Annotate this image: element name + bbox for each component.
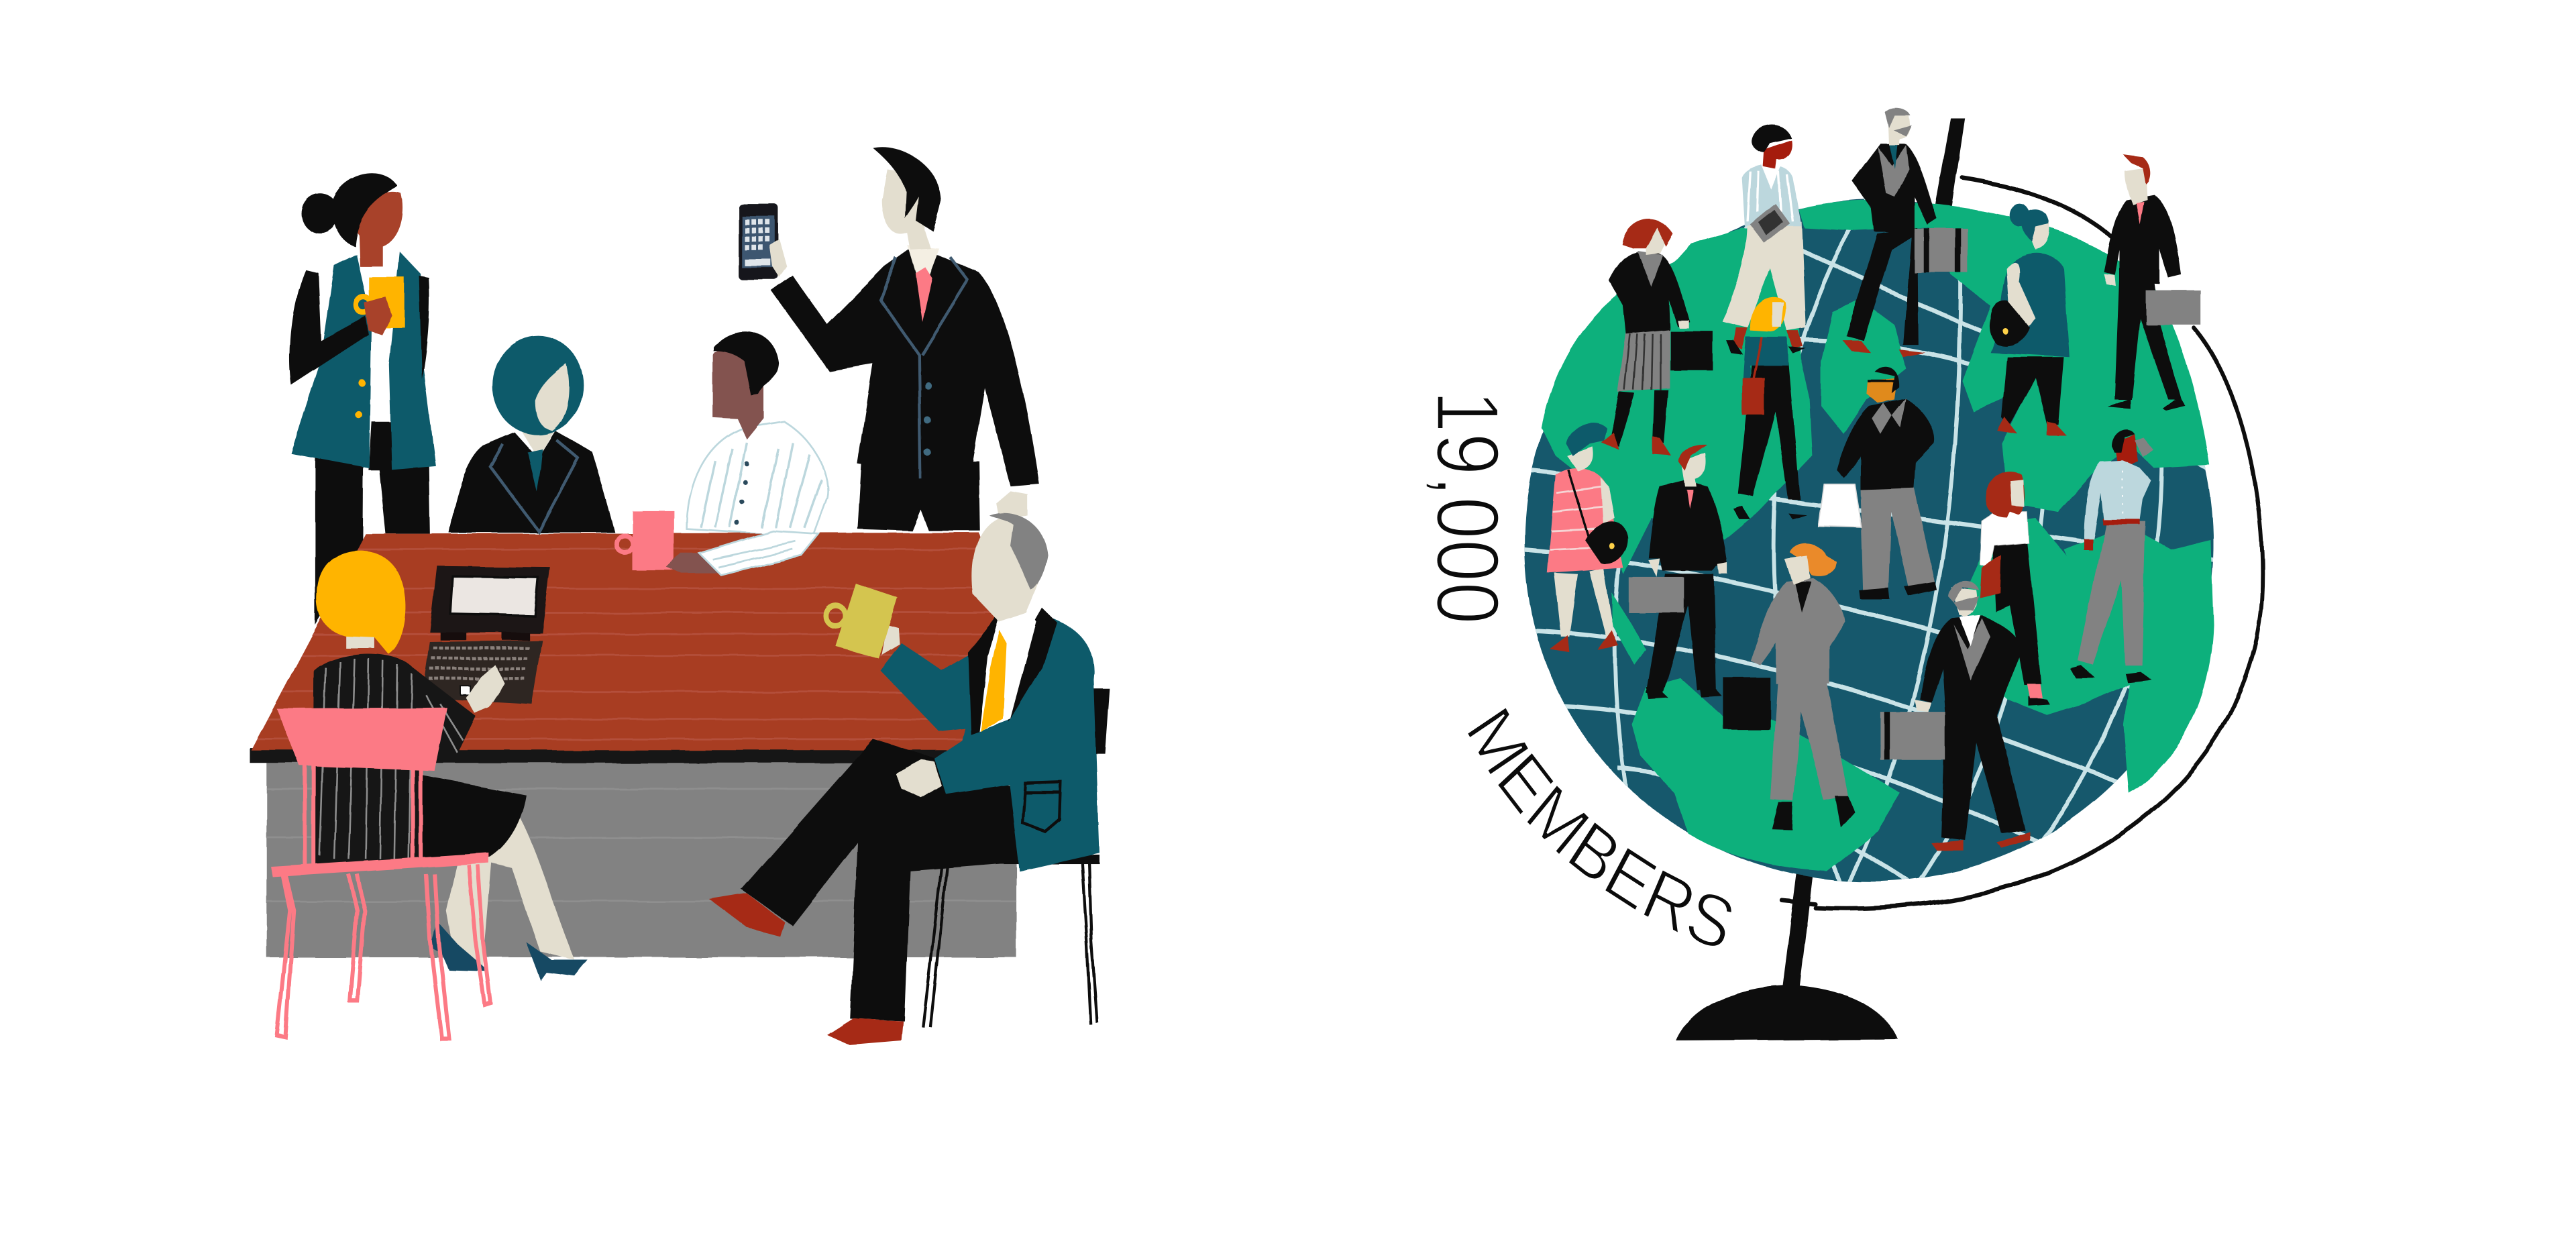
- member: woman in teal dress with black bag: [1989, 204, 2070, 436]
- member: woman in grey suit with black briefcase: [1723, 543, 1855, 829]
- seated man with teal jacket and olive mug: [710, 491, 1099, 1045]
- table top: [228, 533, 1030, 750]
- seated woman with blonde bob: [313, 550, 588, 980]
- member: man with grey briefcase at top: [1843, 108, 1968, 357]
- caption: 19,000 MEMBERS: 19,000: [1418, 390, 1518, 625]
- left scene: business meeting around a table: [228, 147, 1110, 1045]
- globe ocean with grid: [1511, 181, 2228, 899]
- globe meridian arc: [1782, 178, 2263, 908]
- member: bearded man with grey briefcase at bottom: [1880, 580, 2030, 851]
- member: man on phone in light blue shirt: [2070, 429, 2153, 682]
- globe land masses: [1542, 201, 2214, 871]
- member: blonde woman with red bag: [1733, 297, 1807, 519]
- pink mug and man's hand on table: [616, 511, 818, 575]
- caption: 19,000 MEMBERS: [1418, 390, 1731, 946]
- right scene: globe covered with members: [1511, 108, 2263, 1040]
- member: woman with red hair and white top: [1980, 471, 2049, 706]
- member: woman with red hair and black briefcase: [1601, 219, 1713, 455]
- pink chair: [271, 708, 490, 1038]
- standing man with smartphone: [739, 147, 1039, 531]
- member: woman in striped top with tablet: [1722, 125, 1806, 355]
- caption: 19,000 MEMBERS: MEMBERS: [1468, 708, 1731, 946]
- member: woman in pink dress with black bag: [1547, 422, 1628, 653]
- seated woman with teal hair: [449, 335, 615, 533]
- member: man with pink tie and grey briefcase at top right: [2103, 155, 2200, 411]
- globe stand and base: [1676, 119, 1965, 1040]
- full illustration canvas: [250, 107, 2265, 1045]
- standing woman with teal vest and yellow mug: [289, 173, 435, 625]
- table base: [250, 748, 1016, 957]
- black chair: [923, 689, 1110, 1027]
- laptop: [422, 566, 550, 704]
- member: man with red hair and grey briefcase: [1629, 444, 1728, 699]
- seated man in striped shirt: [687, 331, 828, 537]
- member: man with glasses and white bag: [1818, 366, 1937, 600]
